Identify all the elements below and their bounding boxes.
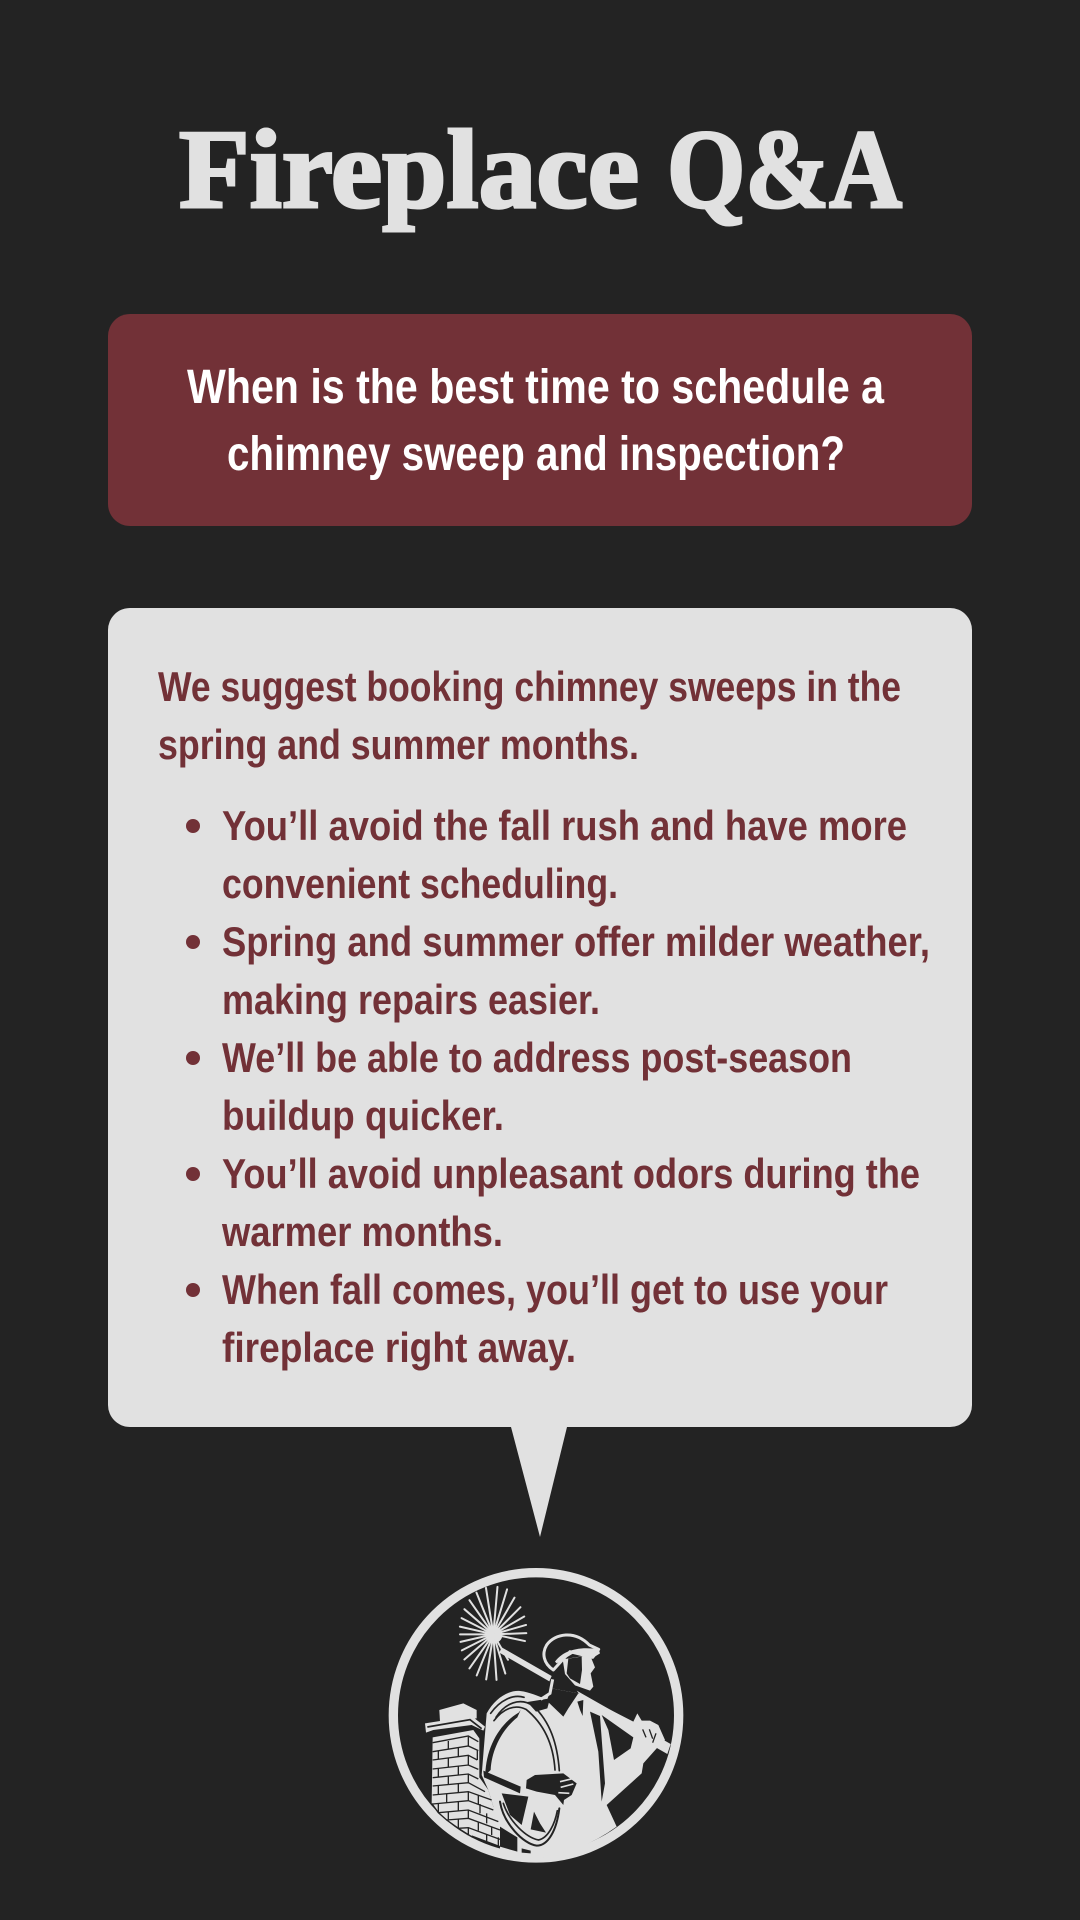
bullet 1: You’ll avoid the fall rush and have more [222, 802, 907, 849]
answer intro text [158, 663, 901, 768]
question text: chimney sweep and inspection? [227, 428, 845, 481]
glove finger lines [558, 1778, 574, 1793]
hand finger lines [643, 1729, 656, 1743]
bullet 4: You’ll avoid unpleasant odors during the [222, 1150, 920, 1197]
bullet 2 [186, 918, 930, 1023]
dark gap beside arm [602, 1715, 633, 1760]
gloved hand [526, 1773, 577, 1805]
face [563, 1655, 595, 1691]
logo ring [393, 1573, 679, 1858]
hair shadow [555, 1657, 582, 1684]
bullet list [186, 802, 930, 1371]
hat dome [544, 1635, 599, 1670]
bullet 2: making repairs easier. [222, 976, 600, 1023]
panel: answer speech bubble [108, 608, 972, 1537]
neck line [541, 1679, 553, 1699]
panel: question [108, 314, 972, 526]
body, rope and hand [425, 1688, 665, 1858]
question text [187, 361, 884, 481]
hat brim [555, 1648, 600, 1663]
collar and neck shadow [527, 1688, 583, 1717]
title: Q&A [667, 108, 902, 232]
rope lines [491, 1696, 559, 1846]
dark coil interior [502, 1793, 546, 1833]
dark sleeve arc [485, 1710, 521, 1775]
bullet 2: Spring and summer offer milder weather, [222, 918, 930, 965]
bullet 4 [186, 1150, 920, 1255]
answer intro text: We suggest booking chimney sweeps in the [158, 663, 901, 710]
dark gaps at the bottom [500, 1827, 531, 1853]
bullet 3: buildup quicker. [222, 1092, 504, 1139]
bullet 5: fireplace right away. [222, 1324, 576, 1371]
answer intro text: spring and summer months. [158, 721, 639, 768]
bullet 5 [186, 1266, 888, 1371]
head and hat [541, 1635, 600, 1699]
bullet 4: warmer months. [221, 1208, 503, 1255]
question text: When is the best time to schedule a [187, 361, 884, 414]
icon: chimney sweep logo [393, 1573, 679, 1858]
bullet 3: We’ll be able to address post-season [222, 1034, 852, 1081]
suspender strap [590, 1712, 605, 1802]
bullet 1: convenient scheduling. [222, 860, 618, 907]
chimney [425, 1703, 500, 1847]
brush [460, 1587, 526, 1680]
bullet 3 [186, 1034, 852, 1139]
title [179, 108, 902, 232]
bullet 5: When fall comes, you’ll get to use your [222, 1266, 888, 1313]
bullet 1 [186, 802, 907, 907]
title: Fireplace [179, 108, 639, 232]
brush pole [499, 1647, 671, 1754]
